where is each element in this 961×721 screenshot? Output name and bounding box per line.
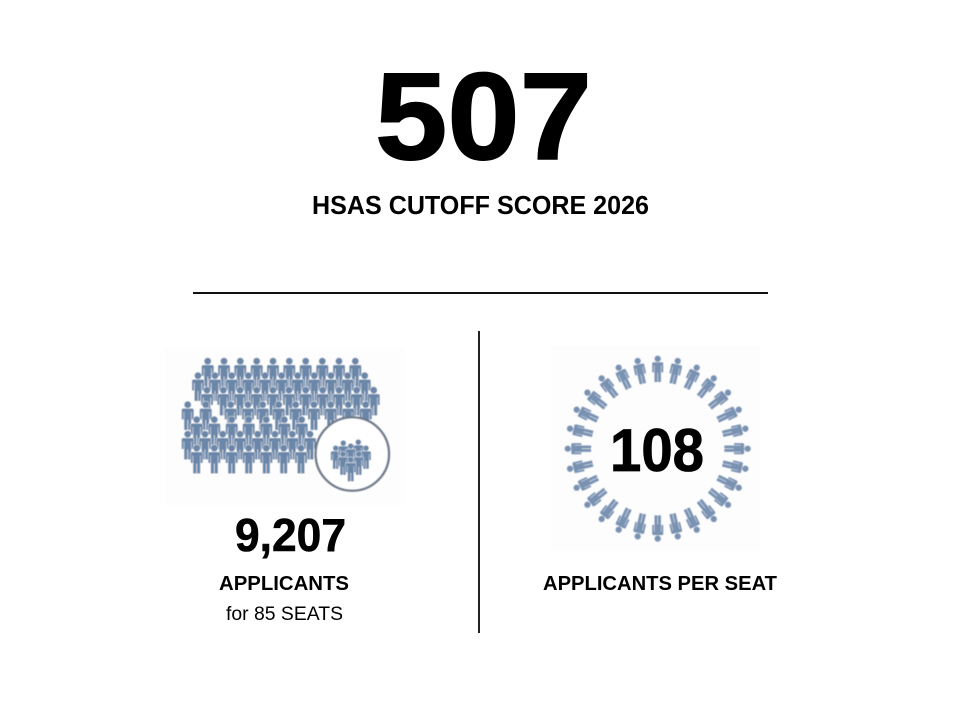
title: cutoff score number: 507 — [375, 48, 592, 186]
label: applicants: APPLICANTS — [219, 572, 349, 595]
icon: crowd of people with highlighted group — [165, 348, 405, 505]
number: applicants count: 9,207 — [235, 509, 346, 561]
panel: applicants — [165, 348, 405, 625]
icon: ring of people — [550, 346, 760, 551]
heading: cutoff score label: HSAS CUTOFF SCORE 2026 — [312, 192, 649, 220]
horizontal divider — [193, 292, 768, 294]
label: applicants per seat: APPLICANTS PER SEAT — [543, 572, 777, 595]
label: seats: for 85 SEATS — [226, 604, 343, 625]
number: applicants per seat: 108 — [610, 417, 704, 484]
vertical divider — [478, 331, 480, 633]
panel: applicants per seat — [543, 346, 777, 595]
